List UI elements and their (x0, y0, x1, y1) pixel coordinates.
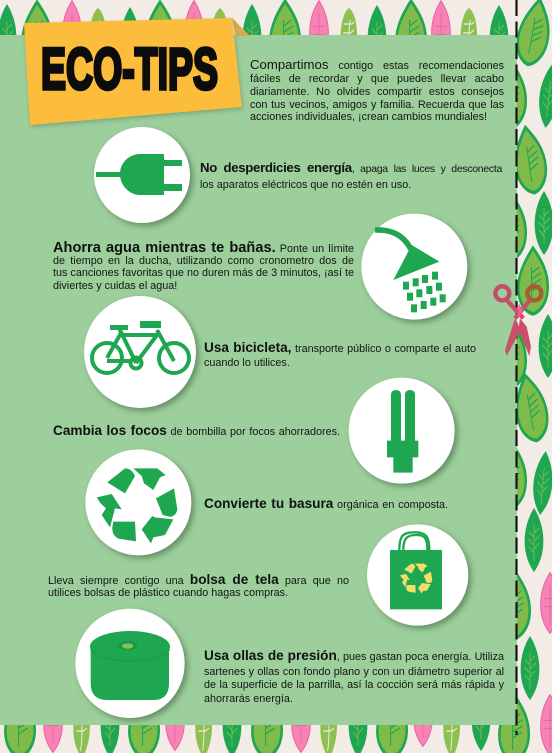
yellow title banner (24, 18, 250, 125)
icon: light bulb (349, 378, 455, 484)
intro text: con tus vecinos, amigos y familia. Recuerda que las (250, 99, 504, 111)
tip: bicycle (204, 340, 476, 369)
tip: water: Ahorra agua mientras te bañas. Ponte un límite (53, 240, 354, 256)
icon: bicycle (84, 296, 196, 408)
tip: pressure cookers (204, 648, 504, 705)
icon: shower (361, 214, 467, 320)
tip: bicycle: Usa bicicleta, transporte público o comparte el auto (204, 340, 476, 355)
dashed cut line (515, 0, 518, 735)
tip: compost: Convierte tu basura orgánica en composta. (204, 496, 448, 511)
tip: cloth bag: utilices bolsas de plástico cuando hagas compras. (48, 587, 288, 599)
intro text: diariamente. No olvides compartir estos consejos (250, 86, 504, 98)
tip: cloth bag (48, 572, 349, 599)
tip: pressure cookers: de la superficie de la parrilla, así la cocción será más rápida y (204, 679, 504, 691)
tip: energy (200, 160, 502, 191)
tip: energy: No desperdicies energía, apaga las luces y desconecta (200, 160, 502, 175)
intro text: fáciles de recordar y que puedes llevar acabo (250, 73, 504, 85)
tip: water: diviertes y cuidas el agua! (53, 280, 177, 292)
tip: energy: los aparatos eléctricos que no estén en uso. (200, 179, 411, 191)
yellow title banner: ECO-TIPS (41, 37, 218, 102)
tip: cloth bag: Lleva siempre contigo una bolsa de tela para que no (48, 572, 349, 587)
tip: bulbs: Cambia los focos de bombilla por focos ahorradores. (53, 423, 340, 438)
tip: pressure cookers: sartenes y ollas con fondo plano y con un diámetro superior al (204, 666, 504, 678)
icon: cloth bag (367, 524, 468, 626)
tip: water: de tiempo en la ducha, utilizando como cronometro dos de (53, 255, 354, 267)
icon: recycling arrows (85, 449, 191, 555)
intro text: acciones individuales, ¡crean cambios mundiales! (250, 111, 487, 123)
intro text: Compartimos contigo estas recomendaciones (250, 57, 504, 72)
tip: pressure cookers: ahorrarás energía. (204, 693, 293, 705)
tip: water: tus canciones favoritas que no duren más de 3 minutos, ¡así te (53, 267, 354, 279)
intro text (250, 57, 504, 123)
tip: bicycle: cuando lo utilices. (204, 357, 290, 369)
icon: pressure pot (75, 609, 185, 718)
icon: scissors (495, 286, 541, 356)
icon: plug (94, 127, 190, 223)
tip: water (53, 240, 354, 292)
tip: pressure cookers: Usa ollas de presión, pues gastan poca energía. Utiliza (204, 648, 504, 663)
